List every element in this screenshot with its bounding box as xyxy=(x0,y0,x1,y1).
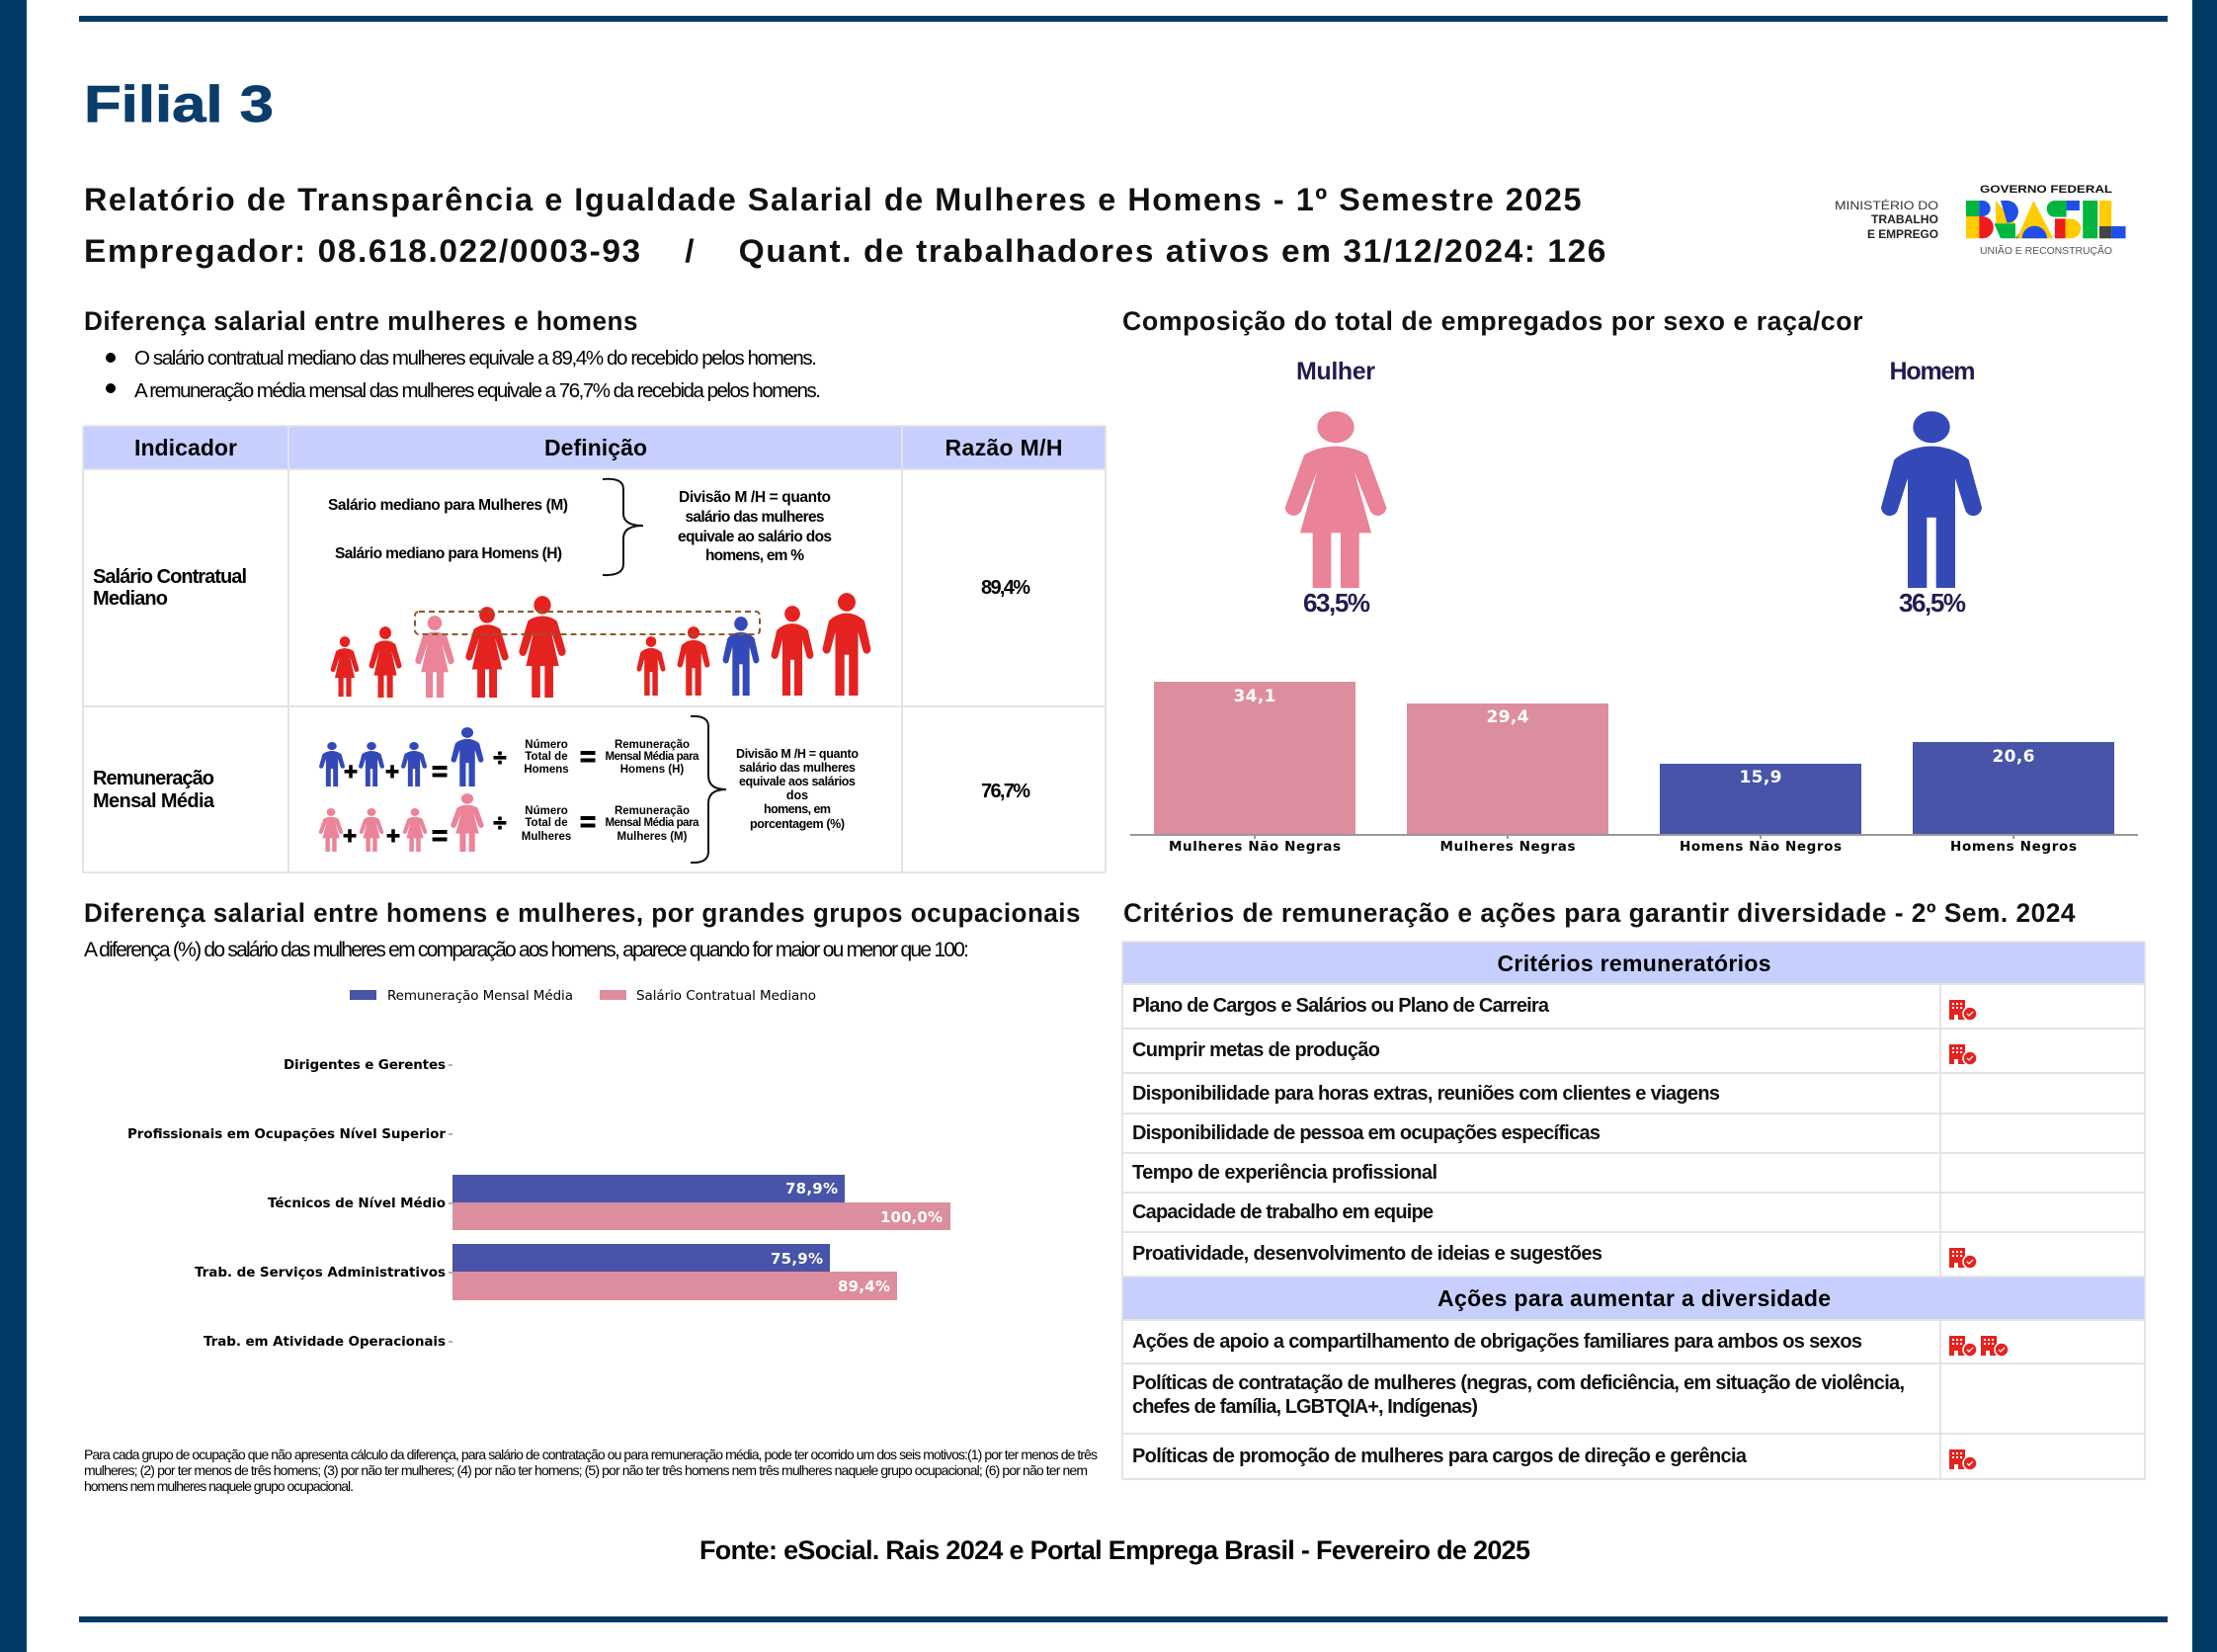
diagram: remuneração média: Mensal Média para xyxy=(605,817,699,829)
title: Filial 3 xyxy=(84,76,274,133)
diagram: remuneração média: Mulheres xyxy=(522,831,571,843)
bar chart: sexo e raça/cor: Homens Negros xyxy=(1950,839,2077,855)
diagram: salário mediano: Salário mediano para Homens (H) xyxy=(335,545,562,562)
criteria rows xyxy=(1132,995,1720,1265)
criteria rows: Proatividade, desenvolvimento de ideias e sugestões xyxy=(1132,1243,1602,1265)
diagram: salário mediano: equivale ao salário dos xyxy=(678,529,832,545)
action rows: Políticas de promoção de mulheres para cargos de direção e gerência xyxy=(1132,1446,1748,1467)
logo: ministério e governo federal: UNIÃO E RECONSTRUÇÃO xyxy=(1980,244,2112,257)
diagram: remuneração média: dos xyxy=(786,788,808,802)
row: remuneração mensal média: Remuneração xyxy=(93,768,214,789)
row: remuneração mensal média: 76,7% xyxy=(981,781,1030,802)
heading: composição: Composição do total de empregados por sexo e raça/cor xyxy=(1122,306,1863,336)
action rows: chefes de família, LGBTQIA+, Indígenas) xyxy=(1132,1396,1478,1418)
bar chart: grupos ocupacionais: Dirigentes e Gerentes xyxy=(284,1057,446,1073)
bar chart: sexo e raça/cor: Mulheres Negras xyxy=(1440,839,1575,855)
logo: ministério e governo federal: GOVERNO FEDERAL xyxy=(1980,184,2112,196)
logo: ministério e governo federal xyxy=(1835,184,2126,257)
bar chart: sexo e raça/cor: Mulheres Não Negras xyxy=(1169,839,1341,855)
bar chart: sexo e raça/cor: Homens Não Negros xyxy=(1680,839,1842,855)
row: remuneração mensal média: Mensal Média xyxy=(93,790,215,812)
table header xyxy=(134,435,1063,460)
bar chart: sexo e raça/cor xyxy=(1130,682,2138,855)
panel: homem: 36,5% xyxy=(1899,588,1966,618)
footnote: homens nem mulheres naquele grupo ocupacional. xyxy=(84,1478,354,1494)
panel: mulher: Mulher xyxy=(1296,358,1375,385)
bar chart: sexo e raça/cor: 34,1 xyxy=(1233,687,1276,706)
diagram: remuneração média: equivale aos salários xyxy=(739,775,856,788)
icons: empresa com check xyxy=(1949,1000,2009,1470)
diagram: salário mediano: Divisão M /H = quanto xyxy=(679,489,831,506)
footnote: mulheres; (2) por ter menos de três homens; (3) por não ter mulheres; (4) por não ter homens; (5) por não ter três homens nem três mulheres naquele grupo ocupacional; (6) por não ter nem xyxy=(84,1462,1088,1478)
diagram: remuneração média: = xyxy=(580,741,596,772)
logo: ministério e governo federal: MINISTÉRIO DO xyxy=(1835,200,1938,212)
bar chart: grupos ocupacionais: 78,9% xyxy=(785,1180,838,1198)
bar chart: grupos ocupacionais: Trab. em Atividade Operacionais xyxy=(204,1334,446,1350)
diagram: remuneração média: Mensal Média para xyxy=(605,751,699,763)
diagram: remuneração média: + xyxy=(386,823,400,850)
legend xyxy=(350,988,816,1004)
panel: homem: Homem xyxy=(1889,358,1976,385)
footnote xyxy=(84,1446,1098,1494)
bar chart: grupos ocupacionais: Técnicos de Nível Médio xyxy=(268,1196,446,1211)
bar chart: grupos ocupacionais: 89,4% xyxy=(838,1278,890,1295)
panel: homem xyxy=(1881,358,1982,618)
bullet list xyxy=(106,347,821,402)
row: remuneração mensal média xyxy=(93,768,1030,812)
action rows: Políticas de contratação de mulheres (negras, com deficiência, em situação de violência, xyxy=(1132,1372,1905,1394)
panel: mulher: 63,5% xyxy=(1303,588,1370,618)
bar chart: grupos ocupacionais: Profissionais em Ocupações Nível Superior xyxy=(127,1126,446,1142)
criteria rows: Tempo de experiência profissional xyxy=(1132,1162,1437,1184)
diagram: salário mediano: homens, em % xyxy=(705,547,804,564)
diagram: remuneração média: Número xyxy=(525,739,568,751)
header: critérios remuneratórios: Critérios remuneratórios xyxy=(1498,950,1770,976)
diagram: remuneração média: Total de xyxy=(525,751,568,763)
table header: Razão M/H xyxy=(944,435,1063,460)
legend: Remuneração Mensal Média xyxy=(387,988,573,1004)
report heading xyxy=(84,182,1607,269)
row: salário contratual mediano: Salário Contratual xyxy=(93,566,247,588)
logo: ministério e governo federal: TRABALHO xyxy=(1871,214,1938,226)
bar chart: grupos ocupacionais: 75,9% xyxy=(771,1250,823,1268)
row: salário contratual mediano: 89,4% xyxy=(981,577,1030,599)
report heading: Relatório de Transparência e Igualdade Salarial de Mulheres e Homens - 1º Semestre 2025 xyxy=(84,182,1583,217)
bar chart: sexo e raça/cor: 15,9 xyxy=(1739,768,1782,787)
diagram: remuneração média: ÷ xyxy=(493,810,507,837)
diagram: remuneração média: = xyxy=(580,806,596,837)
diagram: salário mediano: salário das mulheres xyxy=(686,509,824,526)
table: indicadores xyxy=(83,426,1106,872)
bar chart: sexo e raça/cor: 29,4 xyxy=(1486,707,1529,727)
diagram: remuneração média: = xyxy=(432,820,448,851)
diagram: remuneração média: porcentagem (%) xyxy=(750,817,845,831)
row: salário contratual mediano: Mediano xyxy=(93,588,168,610)
diagram: remuneração média: salário das mulheres xyxy=(739,761,856,775)
diagram: remuneração média: Mulheres (M) xyxy=(617,831,688,843)
criteria rows: Capacidade de trabalho em equipe xyxy=(1132,1201,1434,1223)
bar chart: sexo e raça/cor: 20,6 xyxy=(1992,747,2035,767)
diagram: remuneração média: + xyxy=(385,759,399,785)
diagram: remuneração média: Divisão M /H = quanto xyxy=(736,747,859,761)
diagram: remuneração média: Homens xyxy=(524,764,569,776)
header: ações para aumentar a diversidade: Ações para aumentar a diversidade xyxy=(1437,1285,1831,1311)
subtitle: grupos ocupacionais: A diferença (%) do salário das mulheres em comparação aos homens, aparece quando for maior ou menor que 100: xyxy=(84,939,969,961)
table header: Indicador xyxy=(134,435,237,460)
criteria rows: Disponibilidade para horas extras, reuniões com clientes e viagens xyxy=(1132,1083,1720,1105)
diagram: remuneração média: Número xyxy=(525,805,568,817)
diagram: salário mediano: Salário mediano para Mulheres (M) xyxy=(328,497,568,514)
criteria rows: Cumprir metas de produção xyxy=(1132,1039,1380,1061)
action rows xyxy=(1132,1331,1905,1467)
bar chart: grupos ocupacionais: Trab. de Serviços Administrativos xyxy=(195,1265,446,1280)
legend: Salário Contratual Mediano xyxy=(636,988,816,1004)
diagram: remuneração média: Remuneração xyxy=(615,739,690,751)
diagram: remuneração média: + xyxy=(344,759,358,785)
heading: grupos ocupacionais: Diferença salarial entre homens e mulheres, por grandes grupos ocupacionais xyxy=(84,898,1081,928)
bullet list: O salário contratual mediano das mulheres equivale a 89,4% do recebido pelos homens. xyxy=(134,347,817,370)
row: salário contratual mediano xyxy=(93,566,1030,610)
diagram: salário mediano xyxy=(328,479,870,698)
criteria rows: Disponibilidade de pessoa em ocupações específicas xyxy=(1132,1122,1601,1144)
bar chart: grupos ocupacionais xyxy=(127,1057,950,1350)
heading: critérios: Critérios de remuneração e ações para garantir diversidade - 2º Sem. 2024 xyxy=(1123,898,2076,928)
criteria rows: Plano de Cargos e Salários ou Plano de Carreira xyxy=(1132,995,1550,1017)
source: Fonte: eSocial. Rais 2024 e Portal Emprega Brasil - Fevereiro de 2025 xyxy=(699,1535,1530,1565)
heading: diferença salarial: Diferença salarial entre mulheres e homens xyxy=(84,306,638,336)
bullet list: A remuneração média mensal das mulheres equivale a 76,7% da recebida pelos homens. xyxy=(134,379,821,402)
bar chart: grupos ocupacionais: 100,0% xyxy=(880,1208,943,1226)
footnote: Para cada grupo de ocupação que não apresenta cálculo da diferença, para salário de contratação ou para remuneração média, pode ter ocorrido um dos seis motivos:(1) por ter menos de três xyxy=(84,1446,1098,1462)
diagram: remuneração média: ÷ xyxy=(493,745,507,772)
diagram: remuneração média: Homens (H) xyxy=(620,764,684,776)
diagram: remuneração média xyxy=(319,716,859,863)
logo: ministério e governo federal: E EMPREGO xyxy=(1867,229,1938,241)
diagram: remuneração média: = xyxy=(432,756,448,786)
action rows: Ações de apoio a compartilhamento de obrigações familiares para ambos os sexos xyxy=(1132,1331,1862,1353)
report heading: Empregador: 08.618.022/0003-93 / Quant. de trabalhadores ativos em 31/12/2024: 126 xyxy=(84,233,1607,269)
panel: mulher xyxy=(1285,358,1386,618)
diagram: remuneração média: Remuneração xyxy=(615,805,690,817)
diagram: remuneração média: Total de xyxy=(525,817,568,829)
diagram: remuneração média: + xyxy=(343,823,357,850)
diagram: remuneração média: homens, em xyxy=(764,802,831,816)
table: critérios e ações xyxy=(1122,942,2145,1479)
table header: Definição xyxy=(544,435,647,460)
